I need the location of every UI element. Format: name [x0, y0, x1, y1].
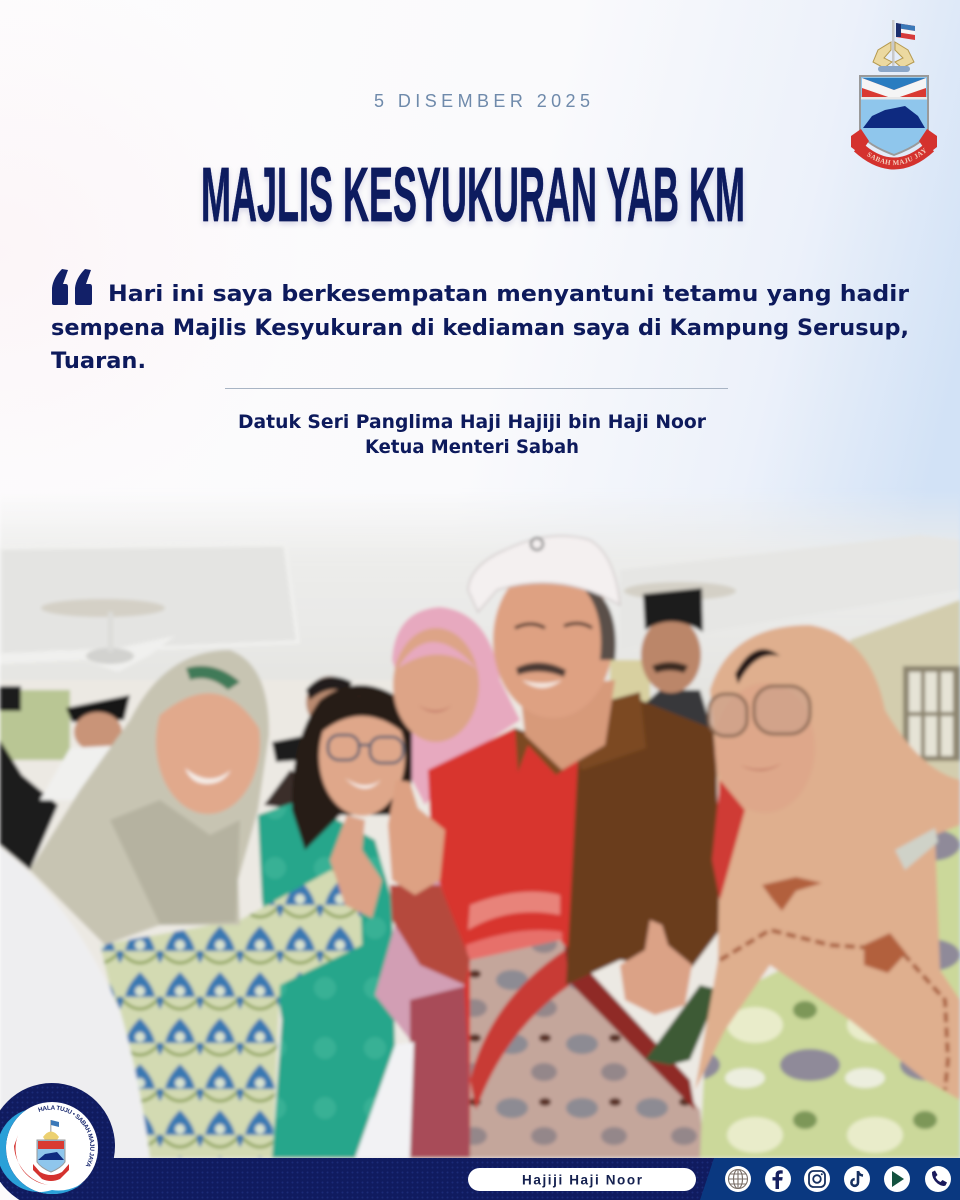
- flag: [892, 20, 915, 68]
- ceiling fan: [0, 612, 175, 672]
- quote block: [51, 269, 910, 374]
- man in black songkok: [632, 588, 712, 760]
- arms holding staff: [873, 42, 914, 72]
- roundel logo: [0, 1083, 115, 1200]
- quote line 2: sempena Majlis Kesyukuran di kediaman saya di Kampung Serusup,: [51, 315, 909, 341]
- icon: quotation mark: [52, 269, 92, 305]
- icon: phone: [925, 1166, 951, 1192]
- woman in peach hijab with glasses: [695, 625, 960, 1158]
- speaker title: Ketua Menteri Sabah: [365, 436, 579, 458]
- white chair back: [355, 1042, 414, 1158]
- roundel logo: HALA TUJU • SABAH MAJU JAYA: [38, 1105, 94, 1166]
- man's raised thumb and sleeve: [388, 780, 470, 985]
- icon: tiktok: [844, 1166, 870, 1192]
- back wall and window: [0, 600, 960, 810]
- white sleeve in foreground: [0, 848, 150, 1158]
- woman in grey hijab and patterned dress: [30, 650, 362, 1158]
- attribution: [238, 411, 707, 458]
- date: 5 DISEMBER 2025: [374, 91, 590, 111]
- background guests: [0, 676, 354, 870]
- man in red and brown shirt with white cap: [428, 536, 720, 1158]
- small crest: [33, 1120, 69, 1181]
- photo: group of guests with the Chief Minister: [0, 490, 960, 1160]
- shield: [860, 76, 928, 155]
- icon: facebook: [765, 1166, 791, 1192]
- social icons: [725, 1166, 951, 1192]
- speaker name: Datuk Seri Panglima Haji Hajiji bin Haji Noor: [238, 411, 707, 433]
- ceiling: [0, 490, 960, 720]
- footer bar: [60, 1158, 960, 1200]
- woman in pink hijab: [375, 607, 520, 1158]
- quote line 3: Tuaran.: [51, 348, 146, 374]
- photo base: [0, 700, 960, 1160]
- footer name pill: Hajiji Haji Noor: [522, 1172, 643, 1188]
- crest: Sabah coat of arms: [851, 20, 937, 170]
- woman's raised thumb: [330, 815, 382, 918]
- icon: website: [725, 1166, 751, 1192]
- footer name pill: [468, 1168, 696, 1191]
- man's second fist: [620, 920, 720, 1065]
- motto ribbon: [851, 129, 937, 170]
- icon: play: [884, 1166, 910, 1192]
- woman in green dress: [258, 685, 414, 1158]
- divider: [225, 388, 728, 389]
- icon: instagram: [804, 1166, 830, 1192]
- quote line 1: Hari ini saya berkesempatan menyantuni tetamu yang hadir: [108, 281, 910, 307]
